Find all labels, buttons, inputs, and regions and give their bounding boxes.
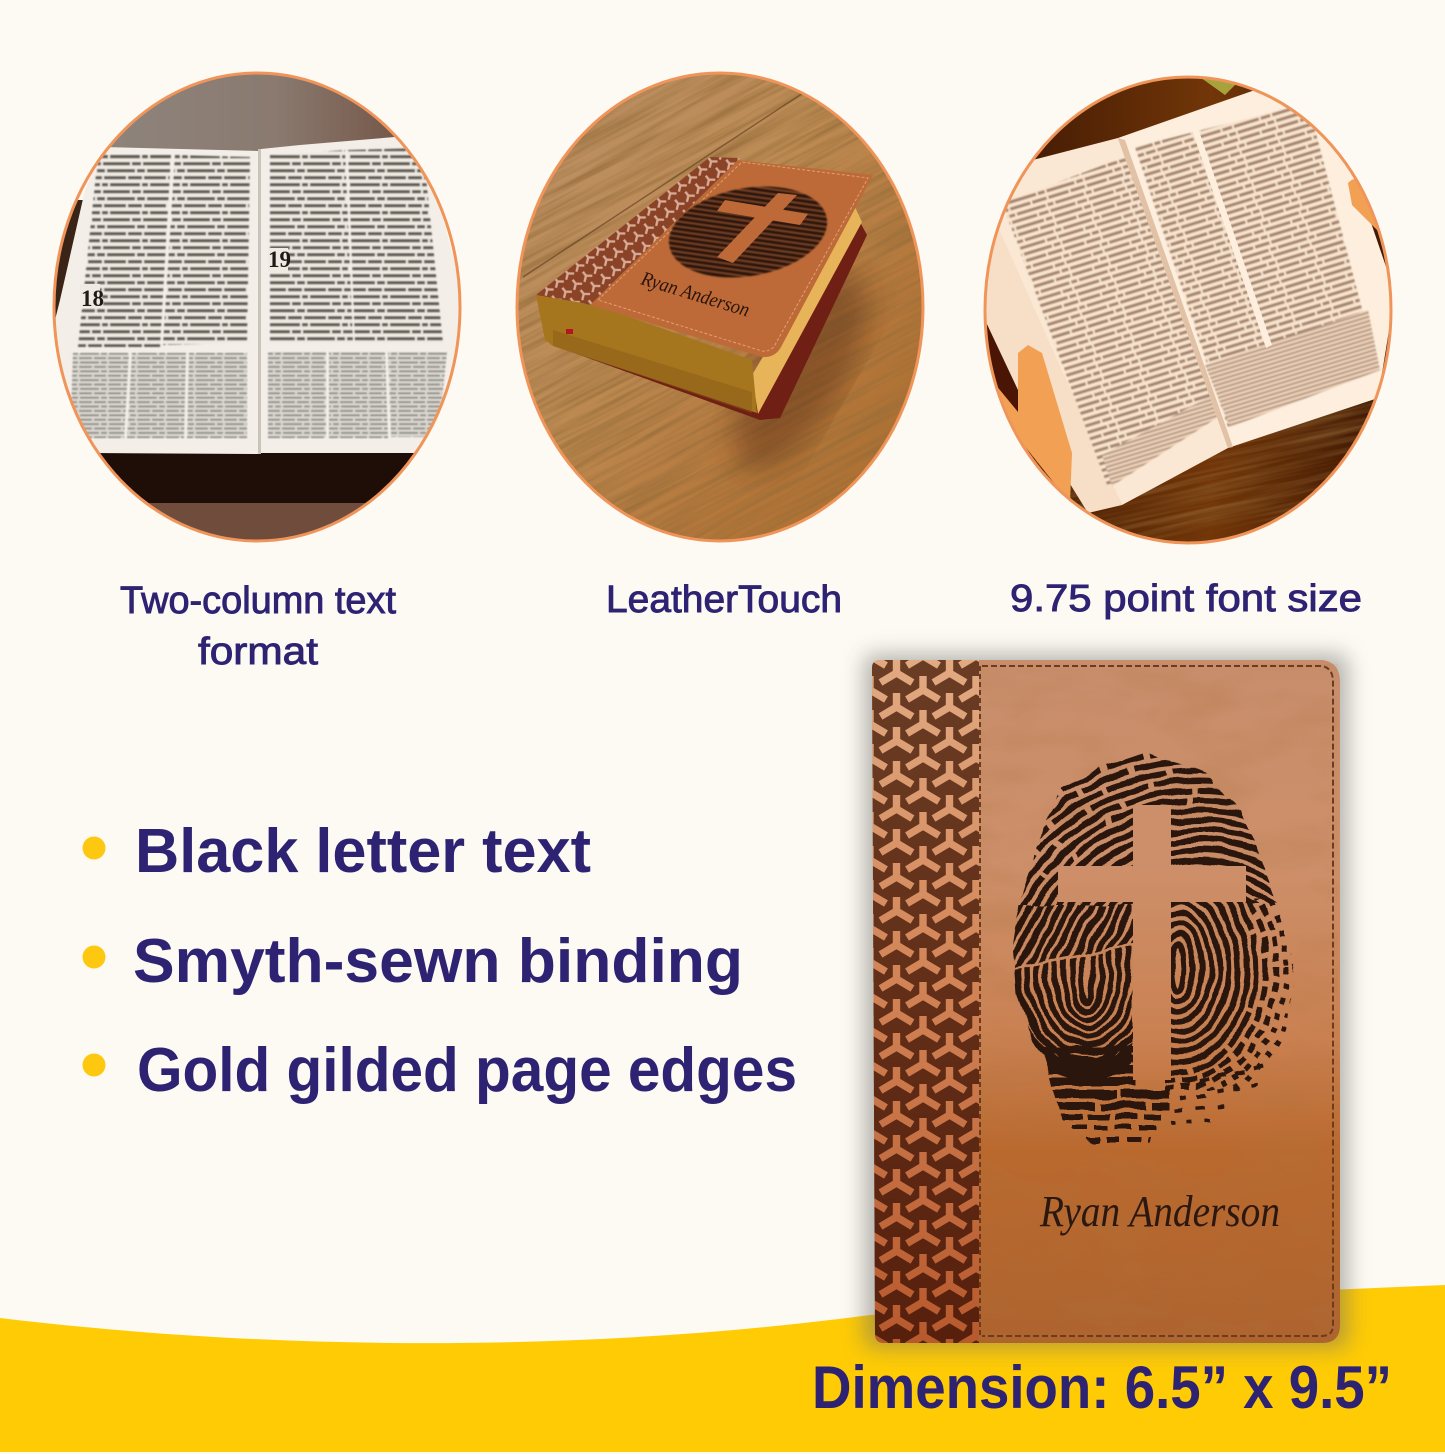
ridges: upper	[1020, 754, 1277, 906]
cross	[1058, 805, 1246, 1080]
engraved name: Ryan Anderson	[1039, 1187, 1280, 1236]
ridges: diagonal band	[1013, 904, 1133, 968]
left page	[995, 138, 1228, 505]
caption: two-column text format: format	[198, 631, 318, 673]
fingerprint with cross	[1013, 754, 1294, 1144]
open book pages: 18	[81, 286, 104, 311]
photo circle: reader holding open book	[984, 76, 1392, 544]
caption: LeatherTouch: LeatherTouch	[606, 579, 842, 621]
bullet: gold gilded page edges: Gold gilded page edges	[137, 1036, 797, 1105]
ridges: lower right whorl	[1164, 898, 1294, 1091]
photo circle: two-column text format	[50, 70, 465, 548]
book cover edge	[985, 320, 1018, 412]
left hand	[998, 345, 1072, 498]
book: Ryan Anderson	[638, 267, 752, 322]
book	[536, 157, 873, 420]
open book pages	[50, 136, 465, 454]
ridges: bottom	[1030, 1050, 1272, 1140]
bullet: smyth-sewn binding: Smyth-sewn binding	[133, 927, 743, 996]
book cover	[872, 660, 1340, 1343]
embossed spine	[871, 660, 979, 1344]
yellow wave band	[0, 1285, 1445, 1452]
right page	[1118, 90, 1395, 448]
right hand	[1348, 179, 1378, 230]
photo circle: leather book on wood table	[516, 72, 924, 542]
open book pages: 19	[268, 247, 291, 272]
feature list	[82, 817, 797, 1105]
cover shadow	[864, 654, 1348, 1348]
caption: two-column text format: Two-column text	[120, 580, 396, 622]
bullet: black letter text: Black letter text	[135, 817, 591, 886]
caption: font size: 9.75 point font size	[1010, 578, 1362, 620]
page stack	[986, 229, 1122, 512]
ridges: lower left loop	[1014, 946, 1133, 1079]
caption: two-column text format	[120, 580, 396, 673]
dimension label: Dimension: 6.5” x 9.5”	[812, 1354, 1392, 1421]
